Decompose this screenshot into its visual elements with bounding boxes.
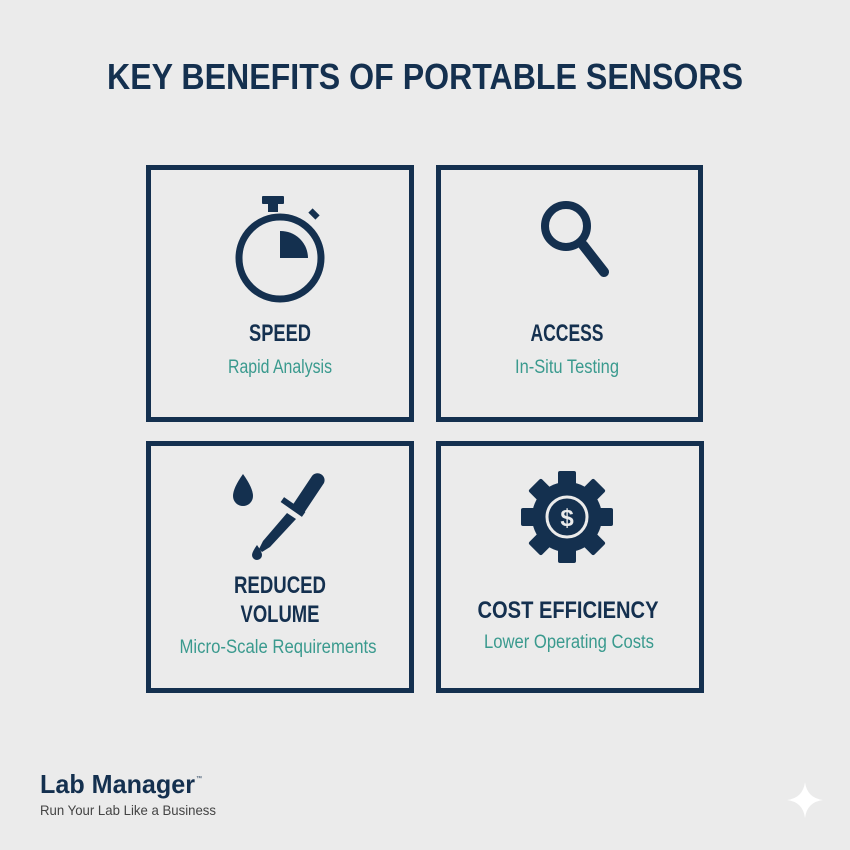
heading: cost efficiency: COST EFFICIENCY: [478, 597, 658, 624]
logo: [40, 769, 216, 818]
icon: gear with dollar: $: [560, 505, 574, 532]
icon: gear with dollar: [521, 471, 613, 563]
icon: dropper: [233, 473, 325, 560]
panel: reduced volume: [148, 444, 412, 690]
logo: ™: [196, 775, 202, 782]
logo: Lab Manager: [40, 769, 195, 799]
subtitle: speed: Rapid Analysis: [228, 357, 332, 378]
heading: reduced volume: REDUCED: [234, 572, 326, 599]
panel: speed: [148, 168, 412, 420]
title: KEY BENEFITS OF PORTABLE SENSORS: [107, 56, 743, 97]
panel: cost efficiency: [438, 444, 702, 690]
subtitle: access: In-Situ Testing: [515, 357, 619, 378]
panel: access: [438, 168, 700, 420]
heading: speed: SPEED: [249, 320, 311, 347]
tagline: Run Your Lab Like a Business: [40, 802, 216, 818]
icon: magnifier: [545, 205, 604, 272]
subtitle: cost efficiency: Lower Operating Costs: [484, 632, 654, 653]
heading: access: ACCESS: [530, 320, 604, 347]
icon: stopwatch: [239, 196, 321, 299]
subtitle: reduced volume: Micro-Scale Requirements: [180, 637, 376, 658]
icon: sparkle: [787, 782, 823, 818]
panel: reduced volume: VOLUME: [240, 601, 320, 628]
